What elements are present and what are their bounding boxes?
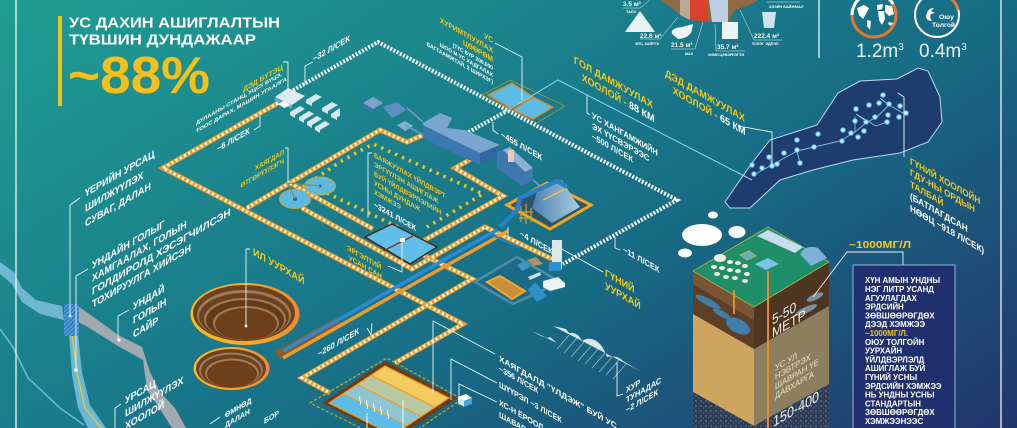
label: rainfall: ~2 Л/СЕК <box>626 386 659 415</box>
cross-section labels: 5-50 <box>772 298 796 328</box>
leader lines <box>69 43 904 428</box>
mineral label and leader <box>813 239 911 297</box>
label: storage reservoir <box>427 0 493 86</box>
consumption comparison: world vs Oyu Tolgoi: Оюу <box>939 14 954 21</box>
mineral concentration callout panel: АШИГЛАЖ БУЙ <box>865 364 926 373</box>
label: tailings notes: ХАЯГДАЛД "ҮЛДЭЖ" БУЙ УС <box>499 352 617 428</box>
seepage pump box <box>458 394 472 407</box>
tailings pond <box>310 358 462 428</box>
product water footprints <box>623 0 804 57</box>
label: utilities: ДЭД БҮТЭЦ <box>243 62 284 94</box>
product water footprints: ЗЭЭЙН БАЙЖМАЛ <box>769 5 804 9</box>
deposit field map <box>725 68 942 208</box>
label: left river notes <box>85 147 280 428</box>
label: deep aquifer field: (БАТЛАГДСАН <box>910 190 968 234</box>
label: left river notes: УРСАЦ <box>125 378 156 407</box>
label: deep aquifer field: ТАЛБАЙ <box>910 178 944 208</box>
consumption comparison: world vs Oyu Tolgoi <box>852 0 967 62</box>
aquifer cross-section block <box>693 227 829 428</box>
label: recycled water <box>374 150 446 251</box>
mineral concentration callout panel: ХҮН АМЫН УНДНЫ <box>865 276 940 285</box>
orange process pipes <box>163 103 552 393</box>
label: storage reservoir: БАГТААМЖТАЙ, 2 ШИРХЭГ) <box>427 40 493 86</box>
label: storage reservoir: ЦӨӨРӨМ <box>463 38 493 64</box>
label: infrastructure pipeline: ХООЛОЙ - 65 КМ <box>673 83 746 138</box>
label: storage reservoir: ШОО М УС ХАДГАЛАХ <box>440 42 493 79</box>
mineral concentration callout panel: ЭРДСИЙН <box>865 302 904 312</box>
mineral concentration callout panel: ОЮУ ТОЛГОЙН <box>865 338 925 347</box>
label: circulation pond: ЭРГЭЛТИЙ <box>347 243 381 272</box>
label: storage reservoir: УС <box>484 31 493 45</box>
cross-section labels: ДАВХАРГА <box>775 368 814 401</box>
label: left river notes: САЙР <box>133 313 158 341</box>
mineral concentration callout panel: ЗӨВШӨӨРӨГДӨХ <box>865 408 935 417</box>
label: rainfall: ХУР <box>626 377 641 395</box>
heading block: ~88% <box>68 47 210 105</box>
consumption comparison: world vs Oyu Tolgoi: 3 <box>961 42 967 53</box>
product water footprints: 21.5 м³ <box>671 42 693 49</box>
consumption comparison: world vs Oyu Tolgoi: Толгой <box>932 21 955 29</box>
product water footprints: 3.5 м³ <box>623 1 642 8</box>
label: left river notes: ТОХИРУУЛГА ХИЙСЭН <box>92 241 191 311</box>
heading block <box>58 14 280 106</box>
label: recycled water: ~3241 Л/СЕК <box>374 200 416 233</box>
river system <box>0 262 186 428</box>
label: circulation pond: УСАН САН <box>349 253 382 281</box>
label: recycled water: ХЭМЖЭЭ <box>374 189 401 212</box>
product water footprints: ХИМИ ЦЭВЭРЛЭГЭЭ <box>708 53 745 57</box>
label: flow rates: ~4 Л/СЕК <box>520 228 553 257</box>
mineral concentration callout panel: ҮЙЛДВЭРЛЭЛД <box>865 356 925 364</box>
label: deep aquifer field: ГҮНИЙ ХООЛОЙН <box>910 155 980 207</box>
label: rainfall: ТУНАДАС <box>626 375 661 405</box>
consumption comparison: world vs Oyu Tolgoi: 3 <box>898 42 904 53</box>
label: flow rates <box>217 32 660 359</box>
mineral concentration callout panel: ЗӨВШӨӨРӨГДӨХ <box>865 312 935 320</box>
product water footprints: 35.7 м³ <box>717 44 739 51</box>
concentrator dome <box>500 180 591 229</box>
mineral concentration callout panel: ~1000МГ/Л. <box>865 329 908 338</box>
label: left river notes: ГОЛДИРОЛД ХЭСЭГЧИЛСЭН <box>92 207 231 298</box>
label: utilities: ТООС ДАРАХ, МАШИН УГААЛГА <box>196 76 287 135</box>
label: flow rates: ~260 Л/СЕК <box>318 325 360 359</box>
label: storage reservoir: (ТҮС БҮР 200,000 <box>453 43 493 72</box>
label: recycled water: БУЙ ҮЙЛДВЭРЛЭЛИЙН <box>374 169 441 217</box>
label: left river notes: ШИЛЖҮҮЛЭХ <box>85 170 143 215</box>
open pits <box>190 283 300 390</box>
cross-section labels: НЭВТРЭХ <box>775 351 811 382</box>
mineral concentration callout panel: ДЭЭД ХЭМЖЭЭ <box>865 320 925 329</box>
cross-section labels: МЕТР <box>772 306 806 341</box>
label: rainfall <box>626 365 661 415</box>
mineral concentration callout panel: УУРХАЙН <box>865 346 902 356</box>
circulation pond <box>365 224 437 264</box>
utility buildings <box>275 88 340 133</box>
mineral concentration callout panel: ГҮНИЙ УСНЫ <box>865 373 917 382</box>
storage reservoir <box>482 80 565 123</box>
white water pipes <box>290 42 677 264</box>
label: deep aquifer field: НӨӨЦ ~918 Л/СЕК) <box>910 202 984 256</box>
label: storage reservoir: ХУРИМТЛУУЛАХ <box>440 15 493 55</box>
label: flow rates: ~455 Л/СЕК <box>501 129 543 163</box>
label: tailings notes: ШҮҮРЭЛ ~3 Л/СЕК <box>499 380 563 426</box>
label: open pit: ИЛ УУРХАЙ <box>253 245 305 288</box>
mineral concentration callout panel <box>853 265 955 428</box>
label: left river notes: ҮЕРИЙН УРСАЦ <box>85 147 155 200</box>
label: recycled water: ЭРГҮҮЛЭН АШИГЛАЖ <box>374 161 439 206</box>
label: river pipeline: ГОЛ ДАМЖУУЛАХ <box>574 55 653 112</box>
label: underground mine: ГҮНИЙ <box>605 266 634 296</box>
label: recycled water: БАЯЖУУЛАХ ҮЙЛДВЭРТ <box>374 150 446 201</box>
consumption comparison: world vs Oyu Tolgoi: 0.4m <box>919 41 961 62</box>
heading block: УС ДАХИН АШИГЛАЛТЫН <box>69 14 280 32</box>
product water footprints: 222.4 м³ <box>754 33 780 40</box>
label: thickener: ӨТГӨРҮҮЛЭГЧ <box>240 158 284 190</box>
label: deep aquifer field <box>910 155 984 256</box>
mineral concentration callout panel: НЭГ ЛИТР УСАНД <box>865 285 934 294</box>
overland conduit <box>277 230 520 358</box>
product water footprints: МАХ <box>685 52 694 56</box>
label: thickener: ХАЯГДАЛ <box>255 149 284 173</box>
clouds <box>678 212 746 258</box>
product water footprints: ЭЛС, ХАЙРГА <box>635 42 659 46</box>
label: water source <box>592 109 658 179</box>
product water footprints: ТАЛХ <box>626 10 637 14</box>
mineral label and leader: ~1000МГ/Л <box>849 239 911 251</box>
thickeners <box>280 177 336 208</box>
label: left river notes: ӨМНӨД <box>225 396 252 420</box>
mineral concentration callout panel: ХЭМЖЭЭНЭЭС <box>865 417 924 426</box>
label: left river notes: УНДАЙН ГОЛЫГ <box>92 217 164 272</box>
mineral concentration callout panel: НЬ УНДНЫ УСНЫ <box>865 390 935 400</box>
label: left river notes: ШИЛЖҮҮЛЭХ <box>125 375 183 420</box>
label: flow rates: ~32 Л/СЕК <box>313 32 350 64</box>
label: left river notes: УНДАЙ <box>133 282 164 313</box>
label: water source: УС ХАНГАМЖИЙН <box>592 109 658 158</box>
label: flow rates: ~6 Л/СЕК <box>217 125 250 154</box>
heading block: ТҮВШИН ДУНДАЖААР <box>69 32 256 48</box>
label: river pipeline: ХООЛОЙ - 88 КМ <box>582 70 655 125</box>
label: water source: ~500 Л/СЕК <box>592 131 634 165</box>
label: utilities <box>196 62 287 135</box>
label: infrastructure pipeline: ДЭД ДАМЖУУЛАХ <box>665 68 745 125</box>
label: recycled water: УСНЫ ДУНДАЖ <box>374 180 421 214</box>
label: left river notes: ХАМГААЛАХ, ГОЛЫН <box>92 219 187 285</box>
cross-section labels <box>772 293 819 428</box>
label: deep aquifer field: ГДУ-НЫ ОРДЫН <box>910 166 975 215</box>
consumption comparison: world vs Oyu Tolgoi: 1.2m <box>856 41 898 62</box>
cross-section labels: УС УЛ <box>775 350 797 373</box>
mineral concentration callout panel: СТАНДАРТЫН <box>865 400 921 408</box>
label: underground mine <box>605 266 641 313</box>
rainfall illustration <box>532 326 640 379</box>
mineral concentration callout panel: ЭРДСИЙН ХЭМЖЭЭ <box>865 382 942 391</box>
label: left river notes: ГОЛЫН <box>133 297 166 327</box>
label: left river notes: БОР <box>264 408 280 426</box>
product water footprints: 22.6 м³ <box>640 33 662 40</box>
yellow recycled-water chevrons <box>303 144 483 228</box>
label: underground mine: УУРХАЙ <box>605 279 641 313</box>
mineral concentration callout panel: АГУУЛАГДАХ <box>865 294 918 303</box>
underground mine site <box>475 240 565 304</box>
processing plant <box>363 97 545 190</box>
product water footprints: ҮСЛЭГ ЭДЛЭЛ <box>752 42 779 46</box>
cross-section labels: ШАВРАН ҮЕ <box>775 356 819 392</box>
label: left river notes: СУВАГ, ДАЛАН <box>85 181 151 230</box>
label: water source: ЭХ ҮҮСВЭРЭЭС <box>592 120 649 164</box>
label: flow rates: ~11 Л/СЕК <box>623 244 660 275</box>
label: utilities: ДУЛААНЫ СТАНЦ, УЦСХ БҮЦЭ, <box>196 71 282 127</box>
label: tailings notes: ~356 Л/СЕК <box>499 364 539 396</box>
